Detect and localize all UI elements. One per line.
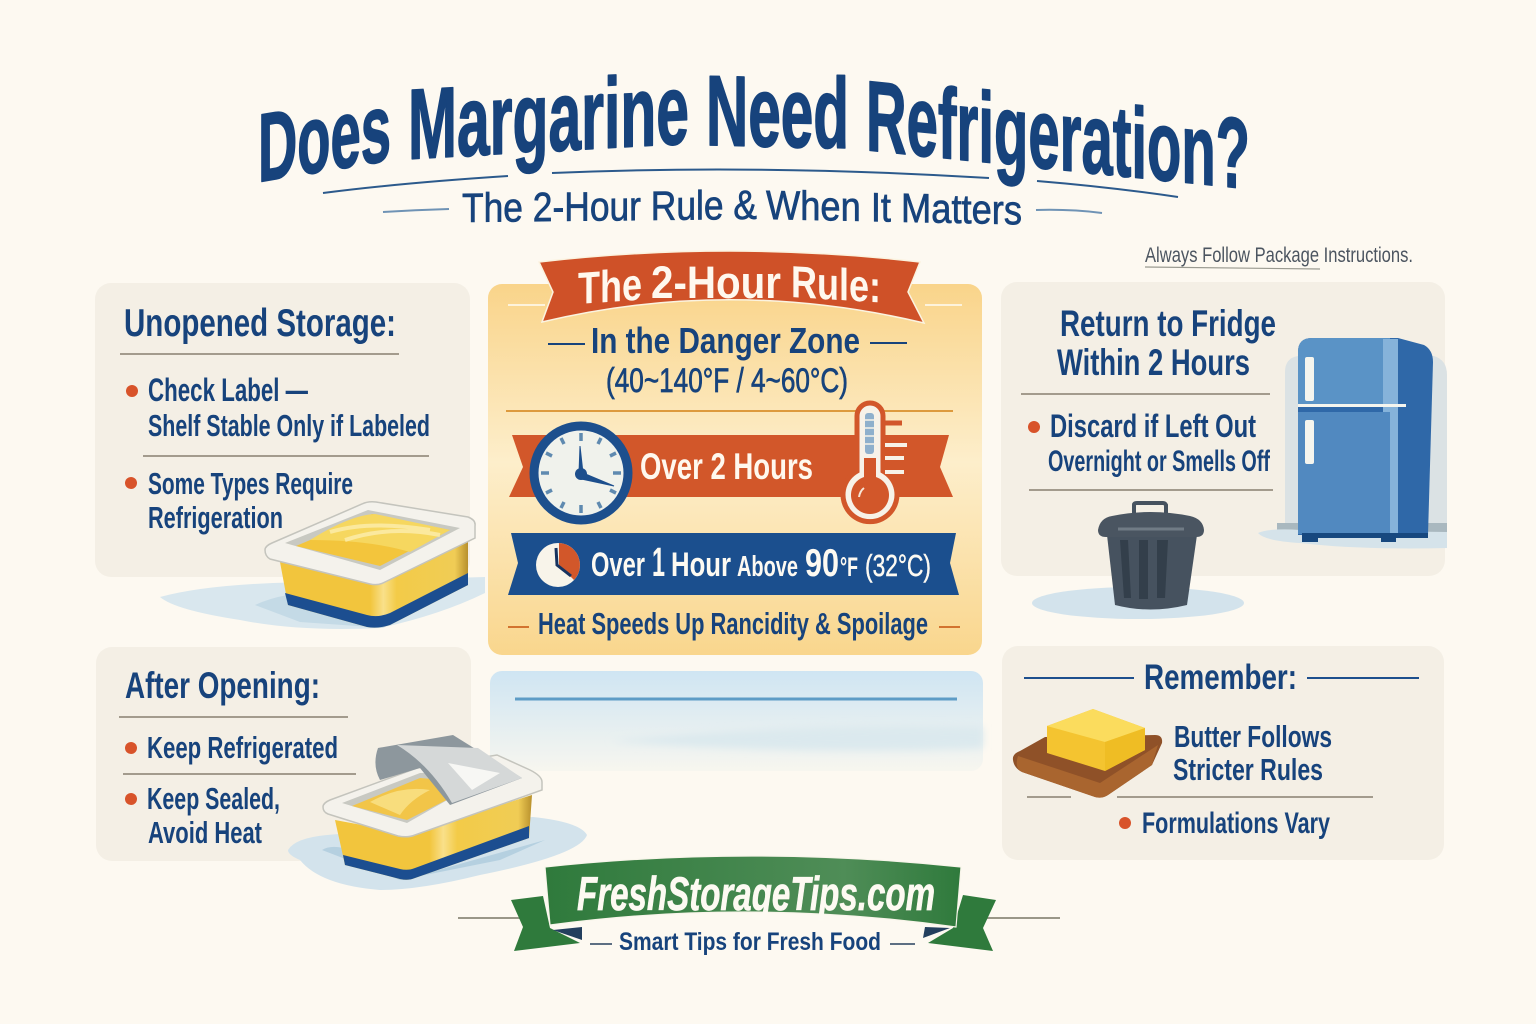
return heading: Return to Fridge <box>1060 303 1276 344</box>
icon: butter on board <box>1013 709 1162 798</box>
ribbon: the 2-hour rule: The <box>578 259 642 314</box>
remember heading: Remember: <box>1144 658 1297 697</box>
panel: empty blue band <box>490 671 983 771</box>
panel: return to fridge: Within 2 Hours <box>1057 342 1250 383</box>
panel: unopened storage <box>95 283 470 577</box>
blue band: over 1 hour: Above <box>737 551 798 583</box>
after opening heading: After Opening: <box>125 665 320 706</box>
subtitle: The 2-Hour Rule & <box>462 182 757 231</box>
icon: margarine tub unopened <box>160 502 485 629</box>
icon: clock <box>534 426 628 520</box>
title: Does <box>258 72 391 203</box>
bullet formulations: Formulations Vary <box>1142 807 1330 840</box>
blue band: over 1 hour <box>508 533 959 595</box>
temperature range: (40~140°F / 4~60°C) <box>606 362 848 400</box>
footer banner <box>511 856 996 951</box>
blue band: over 1 hour: 1 <box>652 539 665 585</box>
title <box>258 53 1250 211</box>
icon: thermometer <box>843 403 907 522</box>
icon: trash can <box>1032 503 1244 619</box>
blue band: over 1 hour: 90 <box>805 542 839 585</box>
blue band: over 1 hour: Over <box>591 546 645 584</box>
title swoosh underline <box>323 169 1178 213</box>
blue band: over 1 hour: Hour <box>671 546 731 584</box>
subtitle: When It Matters <box>766 182 1022 233</box>
package instructions note: Always Follow Package Instructions. <box>1145 244 1413 267</box>
panel: remember: Stricter Rules <box>1173 752 1323 787</box>
title: Need <box>706 55 849 170</box>
blue band: over 1 hour: (32°C) <box>865 548 931 583</box>
icon: small clock <box>536 543 580 587</box>
bullet keep refrigerated: Keep Refrigerated <box>147 730 338 765</box>
panel: after opening: Avoid Heat <box>148 815 262 850</box>
panel: unopened storage: Shelf Stable Only if Labeled <box>148 408 430 443</box>
orange band: over 2 hours: Over 2 Hours <box>640 446 813 487</box>
footer banner: FreshStorageTips.com <box>577 867 935 920</box>
ribbon: the 2-hour rule <box>539 251 924 323</box>
bullet some types: Some Types Require <box>148 466 353 501</box>
bullet check label: Check Label — <box>148 372 308 408</box>
panel: remember <box>1002 646 1444 860</box>
title: Margarine <box>408 53 689 181</box>
heat note: Heat Speeds Up Rancidity & Spoilage <box>538 606 928 641</box>
footer rule <box>458 917 1060 919</box>
icon: refrigerator <box>1258 338 1447 548</box>
panel: danger-zone card <box>488 251 982 655</box>
ribbon: the 2-hour rule: 2-Hour <box>651 257 781 308</box>
unopened heading: Unopened Storage: <box>124 302 396 345</box>
footer tagline: Smart Tips for Fresh Food <box>619 928 881 956</box>
orange band: over 2 hours <box>509 435 953 497</box>
butter note: Butter Follows <box>1174 719 1332 754</box>
panel: return to fridge <box>1001 282 1445 576</box>
icon: margarine tub opened <box>288 735 587 890</box>
title: Refrigeration? <box>866 60 1250 211</box>
bullet keep sealed: Keep Sealed, <box>147 781 280 816</box>
ribbon: the 2-hour rule: Rule: <box>791 256 881 312</box>
blue band: over 1 hour: °F <box>840 552 858 582</box>
panel: unopened storage: Refrigeration <box>148 500 283 535</box>
bullet discard: Discard if Left Out <box>1050 408 1256 444</box>
danger zone heading: In the Danger Zone <box>591 320 860 361</box>
panel: after opening <box>96 647 471 861</box>
subtitle <box>462 182 1022 233</box>
panel: return to fridge: Overnight or Smells Off <box>1048 445 1271 478</box>
